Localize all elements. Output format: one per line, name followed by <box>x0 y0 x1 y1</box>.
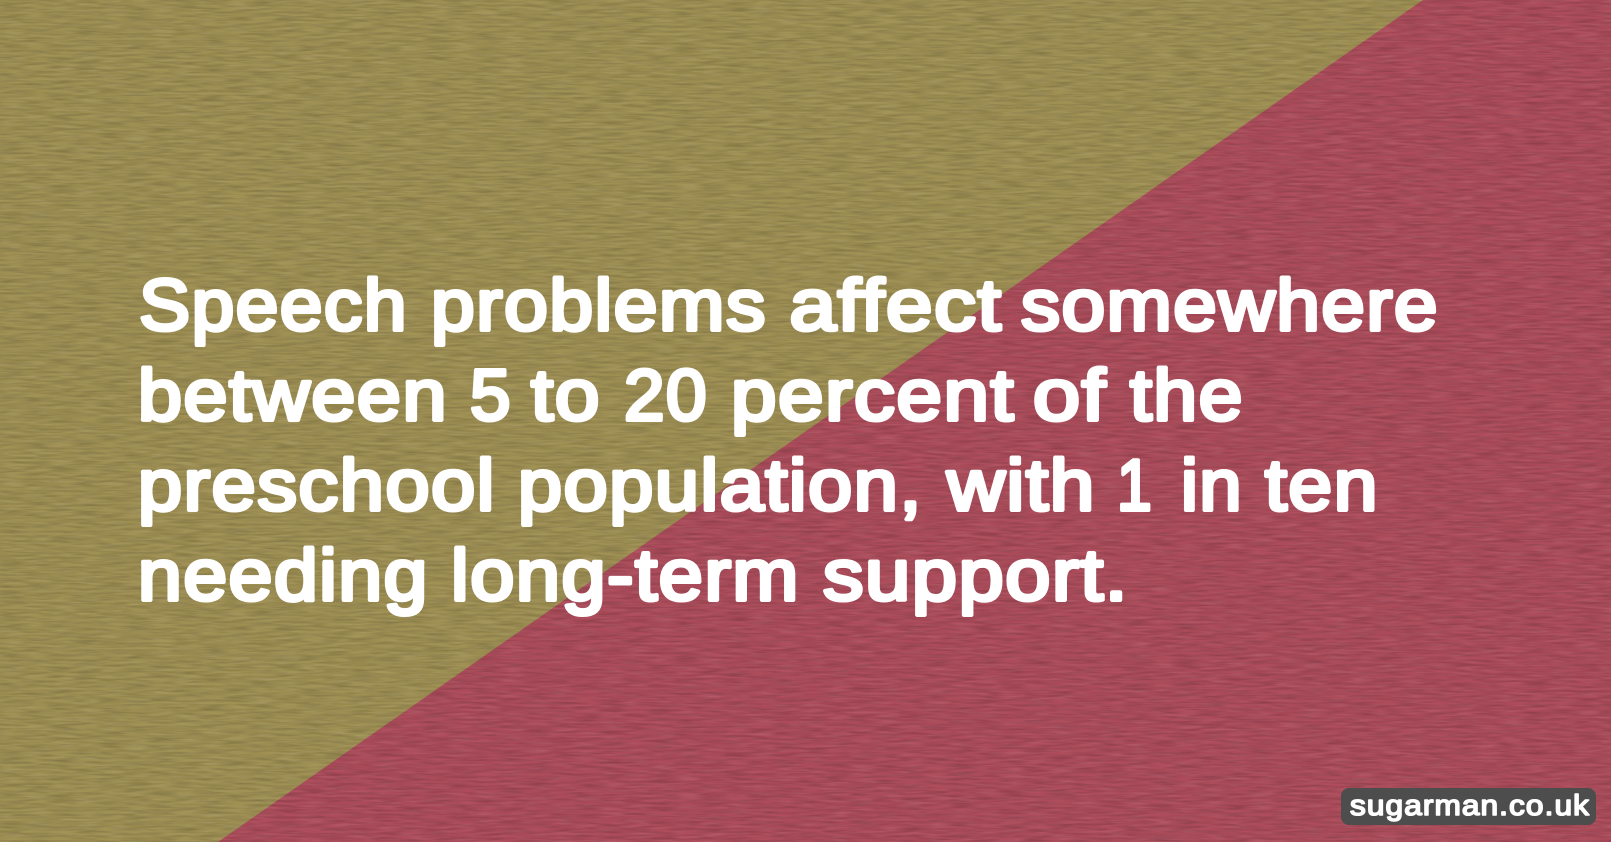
main statement text: in <box>1181 445 1243 526</box>
main statement text: population, <box>518 445 923 526</box>
main statement text <box>138 265 1439 616</box>
main statement text: of <box>1033 355 1107 436</box>
main statement text: 20 <box>624 355 708 436</box>
main statement text: Speech <box>139 265 408 346</box>
main statement text: affect <box>790 265 1002 346</box>
main statement text: with <box>946 445 1096 526</box>
main statement text: the <box>1130 355 1244 436</box>
website badge: sugarman.co.uk <box>1350 790 1590 822</box>
main statement text: percent <box>731 355 1015 436</box>
main statement text: 5 <box>470 355 512 436</box>
main statement text: long-term <box>451 535 800 616</box>
main statement text: somewhere <box>1021 265 1439 346</box>
main statement text: between <box>138 355 448 436</box>
main statement text: problems <box>431 265 767 346</box>
main statement text: preschool <box>138 445 496 526</box>
main statement text: needing <box>138 535 429 616</box>
main statement text: ten <box>1265 445 1379 526</box>
main statement text: to <box>531 355 601 436</box>
main statement text: support. <box>823 535 1129 616</box>
main statement text: 1 <box>1117 445 1153 526</box>
